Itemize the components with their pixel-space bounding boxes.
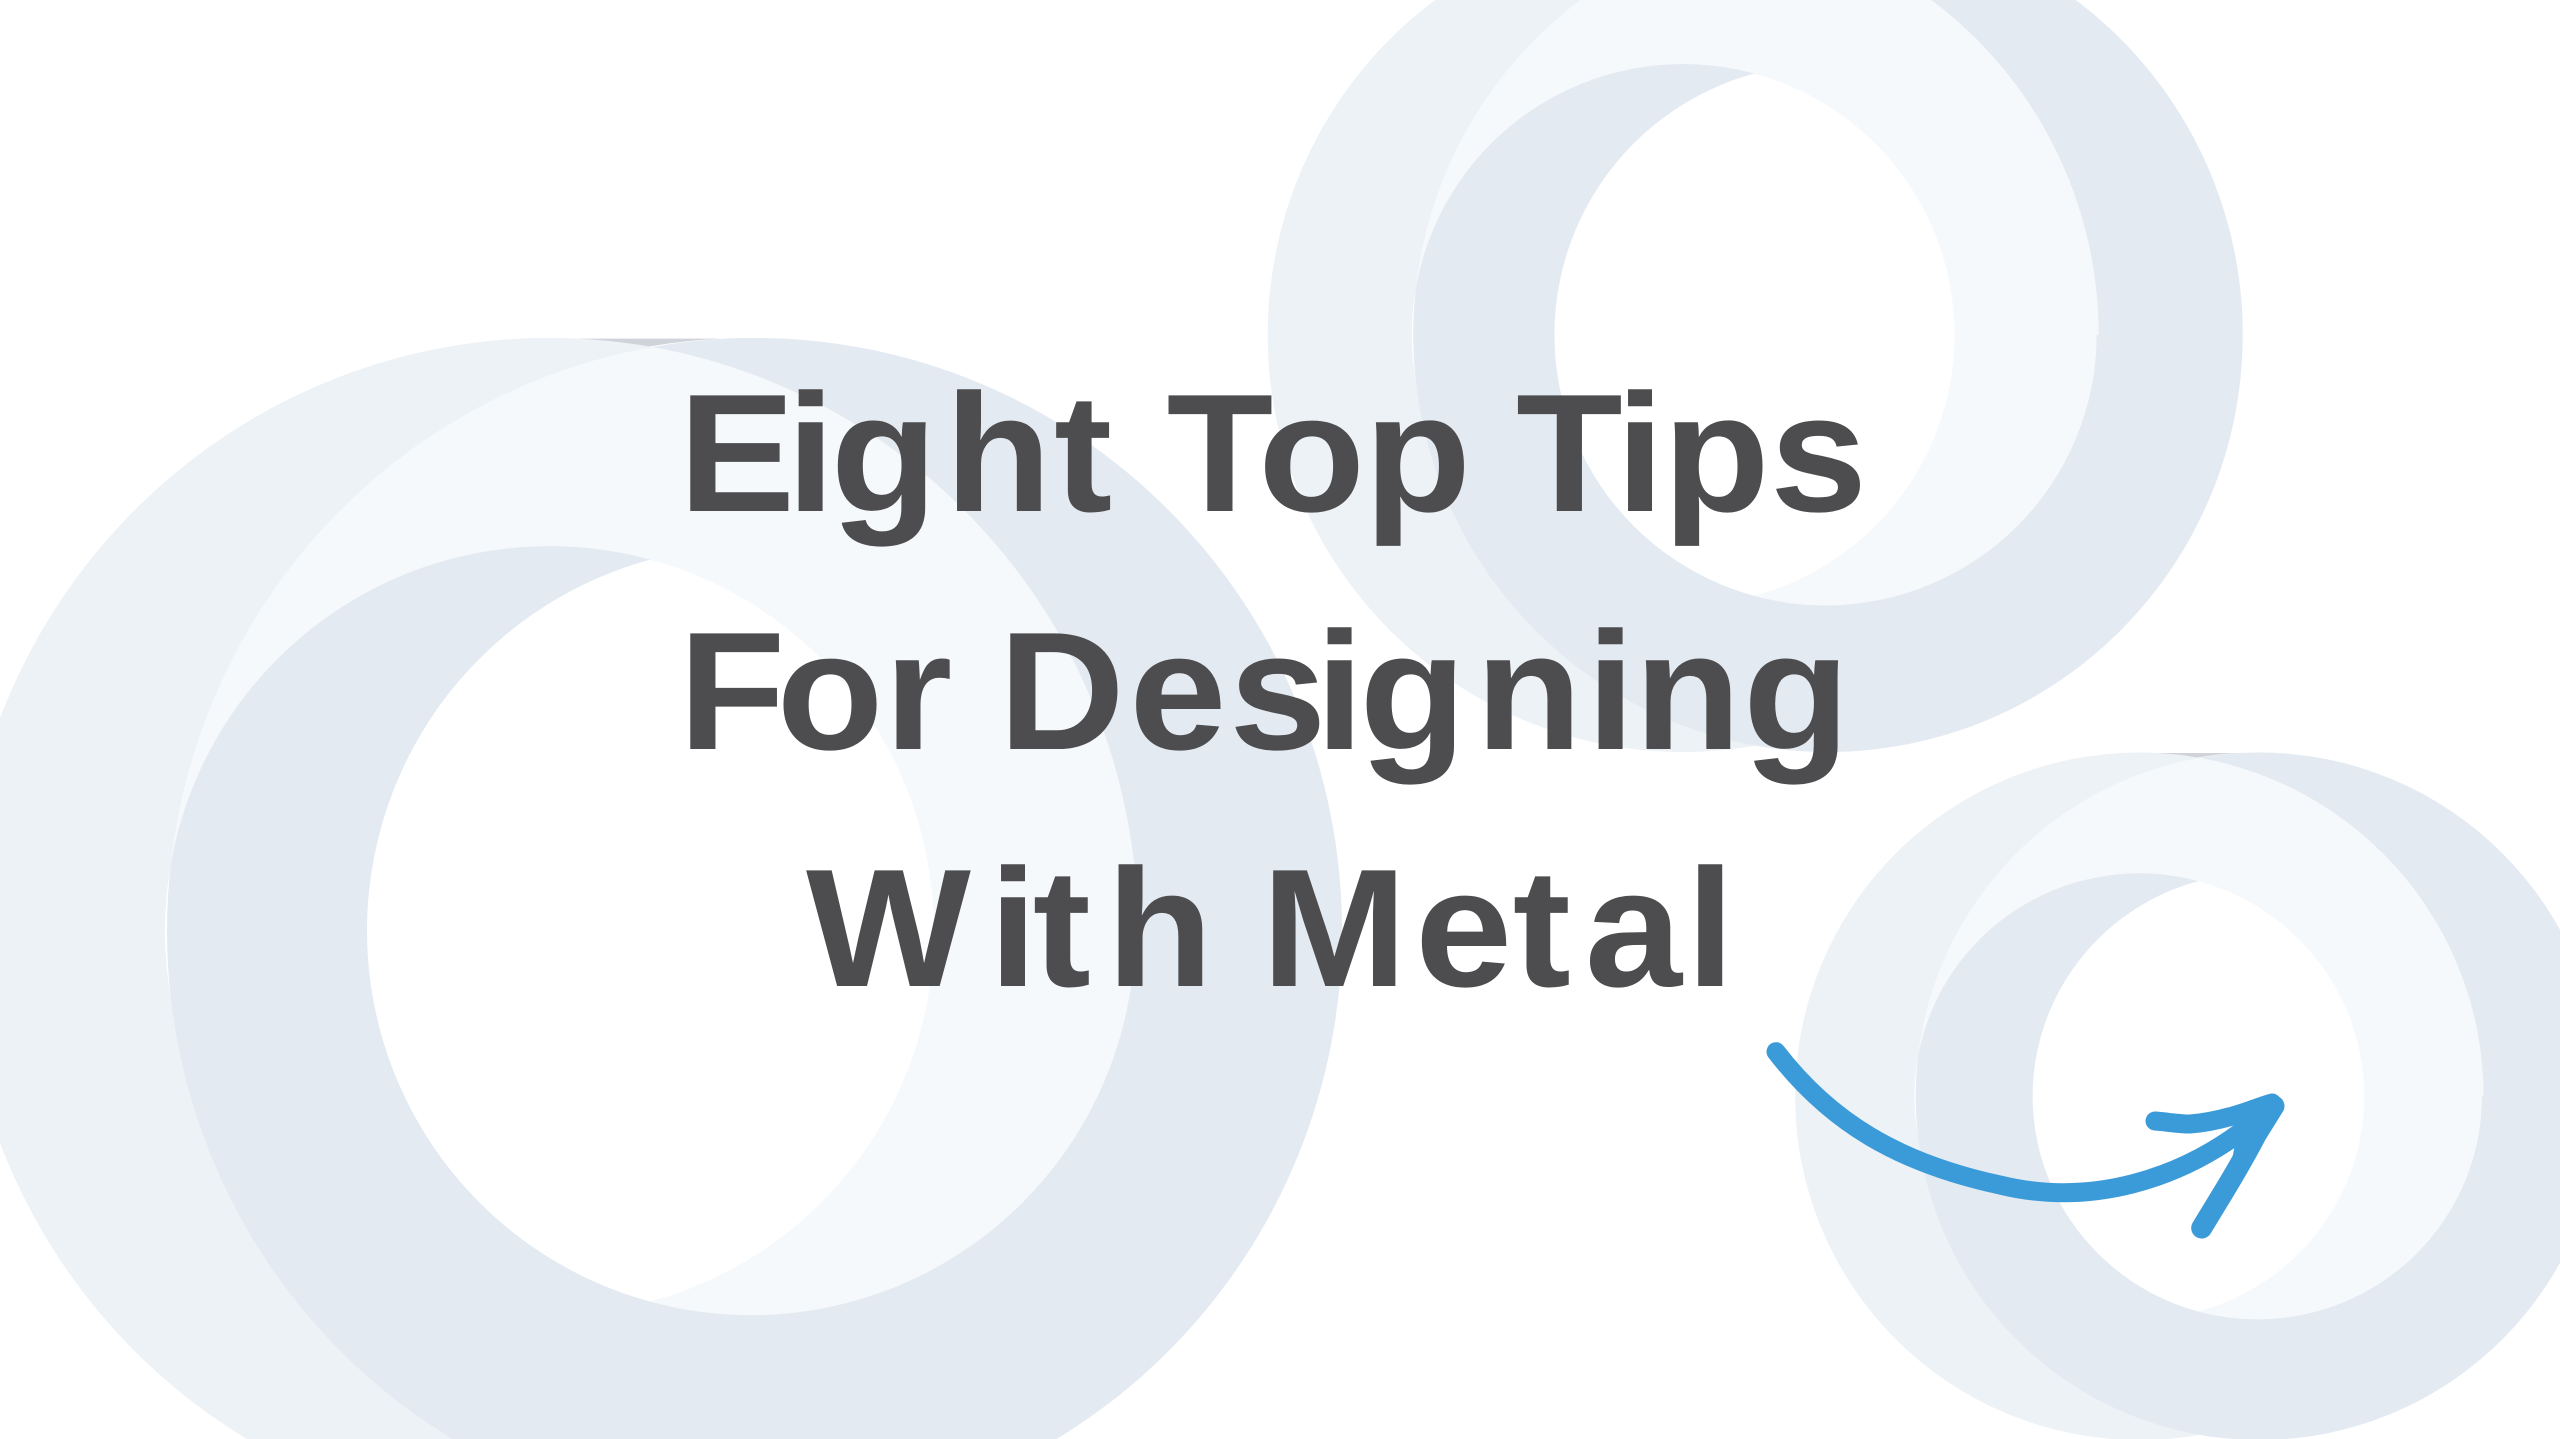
background motif: overlapping rings bottom right xyxy=(1795,753,2560,1439)
title line 2: For Designing xyxy=(679,598,1850,785)
background motif: large overlapping rings left xyxy=(0,338,1342,1439)
title xyxy=(679,360,1867,1022)
title line 1: Eight Top Tips xyxy=(679,360,1867,547)
title line 3: With Metal xyxy=(806,835,1735,1022)
icon: hand-drawn blue arrow xyxy=(1776,1052,2283,1228)
background motif: overlapping rings top right xyxy=(1268,0,2243,752)
